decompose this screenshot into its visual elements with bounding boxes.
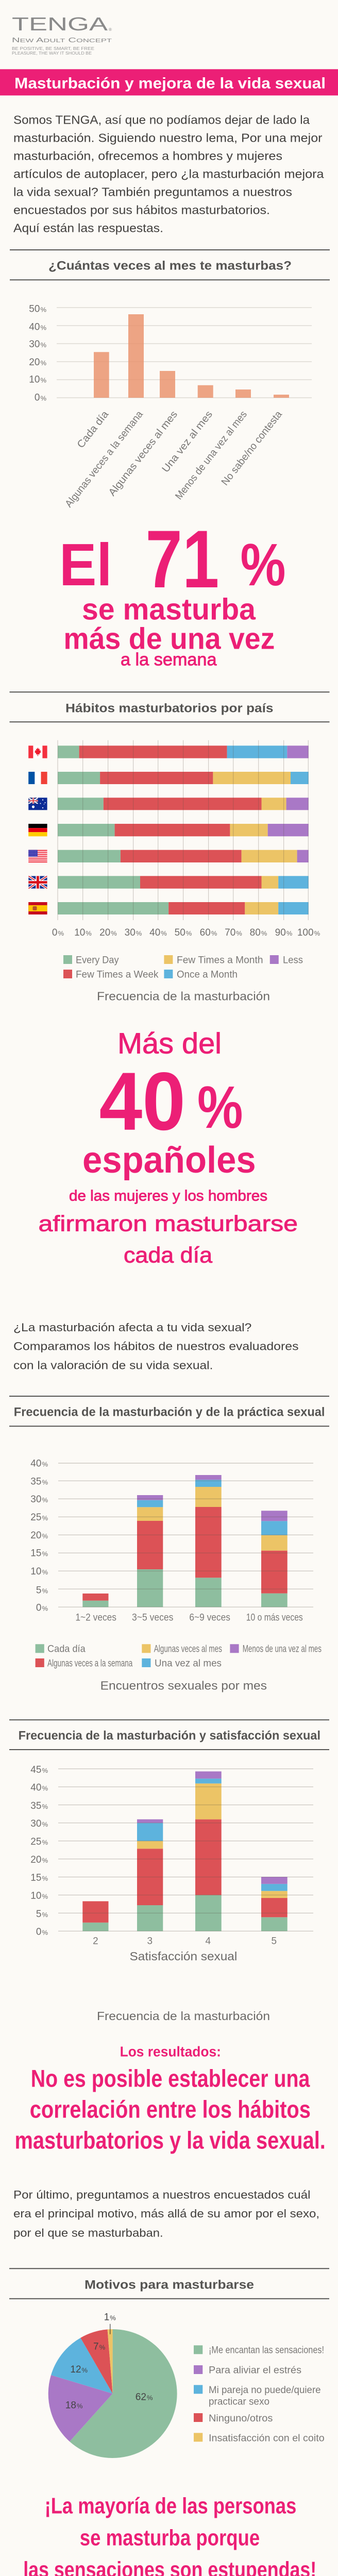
- legend: country chart: Few Times a Month: [177, 955, 263, 965]
- pie chart: motives: [48, 2312, 177, 2458]
- axis title: satisfacción: Satisfacción sexual: [130, 1950, 237, 1963]
- bar chart: frequency per month: Una vez al mes: [160, 409, 215, 474]
- text block: motives: era el principal motivo, más allá de su amor por el sexo,: [13, 2207, 319, 2220]
- legend: encounters chart: Algunas veces al mes: [154, 1644, 222, 1655]
- legend: encounters chart: [36, 1644, 322, 1669]
- icon: flag of Canada: [28, 745, 47, 758]
- icon: flag of Australia: [28, 798, 47, 810]
- intro text block: Aquí están las respuestas.: [13, 222, 163, 235]
- heading: frecuencia y satisfacción: Frecuencia de la masturbación y satisfacción sexual: [19, 1729, 320, 1743]
- icon: flag of UK: [28, 876, 47, 889]
- legend: motives: [194, 2345, 325, 2444]
- stacked bar chart: sexual satisfaction: 40%: [30, 1783, 48, 1793]
- text block: comparison: con la valoración de su vida sexual.: [13, 1359, 213, 1372]
- stacked bar chart: sexual encounters: 1~2 veces: [75, 1613, 116, 1623]
- callout: 71 percent: se masturba: [82, 593, 256, 626]
- axis title: frecuencia: Frecuencia de la masturbación: [97, 990, 270, 1003]
- stacked bar chart: habits by country: 50%: [175, 927, 192, 938]
- bar chart: frequency per month: 30%: [29, 339, 46, 350]
- stacked bar chart: sexual satisfaction: 35%: [30, 1801, 48, 1811]
- logo: TENGA header: ®: [109, 27, 112, 32]
- stacked bar chart: sexual satisfaction: 4: [206, 1936, 211, 1946]
- legend: country chart: [63, 955, 303, 980]
- stacked bar chart: habits by country: 20%: [99, 927, 117, 938]
- pie chart: motives: 12%: [70, 2364, 88, 2375]
- logo: TENGA header: PLEASURE, THE WAY IT SHOULD BE: [12, 51, 92, 56]
- axis title: encuentros: Encuentros sexuales por mes: [100, 1679, 267, 1692]
- bar chart: frequency per month: Menos de una vez al mes: [173, 409, 249, 502]
- stacked bar chart: habits by country: 60%: [200, 927, 217, 938]
- text block: motives: Por último, preguntamos a nuestros encuestados cuál: [13, 2188, 310, 2201]
- title banner: Masturbación y mejora de la vida sexual: [14, 75, 326, 92]
- legend: encounters chart: Cada día: [47, 1644, 86, 1655]
- bar chart: frequency per month: 0%: [35, 392, 46, 403]
- logo: TENGA header: BE POSITIVE, BE SMART, BE FREE: [12, 46, 94, 51]
- stacked bar chart: sexual encounters: 10%: [30, 1566, 48, 1577]
- intro text block: la vida sexual? También preguntamos a nuestros: [13, 185, 292, 199]
- stacked bar chart: habits by country: 30%: [125, 927, 142, 938]
- stacked bar chart: habits by country: 0%: [52, 927, 64, 938]
- text block: comparison: [13, 1321, 299, 1372]
- stacked bar chart: sexual encounters: 25%: [30, 1512, 48, 1523]
- callout: conclusion: se masturba porque: [80, 2526, 260, 2551]
- logo: TENGA header: N EW A DULT C ONCEPT: [12, 36, 112, 44]
- intro text block: Somos TENGA, así que no podíamos dejar de lado la: [13, 113, 310, 127]
- logo: TENGA header: [12, 13, 112, 56]
- icon: flag of Spain: [28, 902, 47, 914]
- stacked bar chart: sexual encounters: 0%: [36, 1603, 48, 1614]
- stacked bar chart: habits by country: 90%: [275, 927, 293, 938]
- pie chart: motives: 62%: [136, 2392, 153, 2403]
- callout: conclusion: [23, 2493, 317, 2576]
- intro text block: [13, 113, 324, 235]
- stacked bar chart: sexual satisfaction: 45%: [30, 1765, 48, 1775]
- bar chart: frequency per month: [29, 304, 312, 510]
- pie chart: motives: 18%: [65, 2400, 83, 2411]
- stacked bar chart: sexual satisfaction: 10%: [30, 1891, 48, 1901]
- legend: motives: Ninguno/otros: [209, 2413, 273, 2424]
- bar chart: frequency per month: 40%: [29, 322, 46, 333]
- callout: 40 percent: afirmaron masturbarse: [38, 1211, 298, 1236]
- callout: results: [14, 2044, 326, 2154]
- logo: TENGA header: TENGA: [12, 13, 108, 35]
- stacked bar chart: habits by country: 10%: [74, 927, 92, 938]
- callout: results: Los resultados:: [120, 2044, 221, 2060]
- legend: encounters chart: Una vez al mes: [155, 1658, 222, 1669]
- legend: motives: practicar sexo: [209, 2396, 269, 2407]
- legend: motives: Mi pareja no puede/quiere: [209, 2385, 321, 2396]
- callout: 71 percent: %: [240, 531, 285, 598]
- bar chart: frequency per month: Cada día: [75, 409, 111, 450]
- heading: hábitos por país: Hábitos masturbatorios por país: [65, 702, 273, 716]
- callout: 71 percent: El: [59, 531, 112, 598]
- stacked bar chart: habits by country: [28, 740, 320, 938]
- stacked bar chart: sexual encounters: 35%: [30, 1477, 48, 1487]
- legend: motives: Insatisfacción con el coito: [209, 2433, 325, 2444]
- callout: 71 percent: [59, 513, 285, 670]
- intro text block: encuestados por sus hábitos masturbatorios.: [13, 204, 270, 217]
- legend: country chart: Less: [283, 955, 303, 965]
- callout: 40 percent: %: [197, 1074, 243, 1141]
- stacked bar chart: sexual satisfaction: 15%: [30, 1872, 48, 1884]
- stacked bar chart: habits by country: 70%: [225, 927, 242, 938]
- legend: country chart: Few Times a Week: [76, 969, 159, 980]
- text block: motives: por el que se masturbaban.: [13, 2227, 163, 2240]
- stacked bar chart: sexual encounters: 40%: [30, 1459, 48, 1469]
- heading: cuántas veces: ¿Cuántas veces al mes te masturbas?: [48, 259, 292, 273]
- legend: motives: Para aliviar el estrés: [209, 2365, 301, 2376]
- icon: flag of USA: [28, 850, 47, 862]
- legend: country chart: Every Day: [76, 955, 119, 965]
- text block: comparison: ¿La masturbación afecta a tu vida sexual?: [13, 1321, 251, 1334]
- intro text block: masturbación, ofrecemos a hombres y mujeres: [13, 149, 282, 163]
- stacked bar chart: habits by country: 100%: [297, 927, 320, 938]
- stacked bar chart: sexual satisfaction: 25%: [30, 1836, 48, 1848]
- stacked bar chart: sexual encounters: 15%: [30, 1548, 48, 1559]
- bar chart: frequency per month: No sabe/no contesta: [219, 409, 284, 488]
- stacked bar chart: sexual satisfaction: 5: [272, 1936, 277, 1946]
- stacked bar chart: sexual satisfaction: 20%: [30, 1855, 48, 1865]
- text block: motives: [13, 2188, 319, 2240]
- heading: frecuencia y práctica sexual: Frecuencia de la masturbación y de la práctica sexual: [14, 1405, 325, 1419]
- stacked bars: [58, 745, 309, 914]
- stacked bar chart: sexual satisfaction: 5%: [36, 1909, 48, 1920]
- stacked bar chart: habits by country: 40%: [149, 927, 167, 938]
- stacked bar chart: sexual encounters: 6~9 veces: [189, 1613, 230, 1623]
- stacked bar chart: sexual satisfaction: 0%: [36, 1927, 48, 1937]
- callout: 40 percent: Más del: [117, 1027, 222, 1060]
- heading: motivos: Motivos para masturbarse: [84, 2278, 254, 2292]
- bar chart: frequency per month: Algunas veces a la semana: [63, 409, 145, 510]
- axis title: frecuencia 2: Frecuencia de la masturbación: [97, 2009, 270, 2023]
- title banner: [0, 69, 338, 95]
- callout: 40 percent: 40: [99, 1055, 185, 1147]
- stacked bar chart: sexual satisfaction: 2: [93, 1936, 98, 1946]
- stacked bar chart: sexual satisfaction: [30, 1765, 313, 1946]
- stacked bar chart: sexual encounters: 5%: [36, 1585, 48, 1596]
- stacked bar chart: sexual satisfaction: 3: [147, 1936, 153, 1946]
- callout: 40 percent: de las mujeres y los hombres: [69, 1188, 267, 1205]
- callout: 71 percent: más de una vez: [63, 622, 275, 655]
- callout: 40 percent: cada día: [124, 1243, 212, 1268]
- stacked bar chart: sexual encounters: [30, 1459, 313, 1623]
- bar chart: frequency per month: 10%: [29, 374, 46, 385]
- legend: encounters chart: Algunas veces a la semana: [47, 1658, 133, 1669]
- bar chart: frequency per month: 20%: [29, 357, 46, 368]
- callout: 71 percent: 71: [145, 513, 219, 605]
- pie chart: motives: 1%: [104, 2312, 116, 2323]
- stacked bar chart: sexual encounters: 20%: [30, 1530, 48, 1541]
- stacked bar chart: sexual encounters: 30%: [30, 1494, 48, 1505]
- bar chart: frequency per month: 50%: [29, 304, 46, 315]
- callout: 71 percent: a la semana: [121, 650, 217, 670]
- stacked bar chart: sexual encounters: 3~5 veces: [132, 1613, 173, 1623]
- stacked bar chart: sexual satisfaction: 30%: [30, 1819, 48, 1829]
- icon: flag of Germany: [28, 824, 47, 836]
- stacked bar chart: habits by country: 80%: [250, 927, 267, 938]
- text block: comparison: Comparamos los hábitos de nuestros evaluadores: [13, 1340, 299, 1353]
- stacked bar chart: sexual encounters: 10 o más veces: [246, 1613, 303, 1623]
- pie chart: motives: 7%: [93, 2342, 106, 2352]
- icon: flag of France: [28, 772, 47, 784]
- bar chart: frequency per month: Algunas veces al mes: [107, 409, 180, 498]
- callout: 40 percent: [38, 1027, 298, 1268]
- legend: country chart: Once a Month: [177, 969, 238, 980]
- intro text block: masturbación. Siguiendo nuestro lema, Por una mejor: [13, 131, 323, 145]
- intro text block: artículos de autoplacer, pero ¿la masturbación mejora: [13, 167, 324, 181]
- callout: 40 percent: españoles: [82, 1140, 256, 1181]
